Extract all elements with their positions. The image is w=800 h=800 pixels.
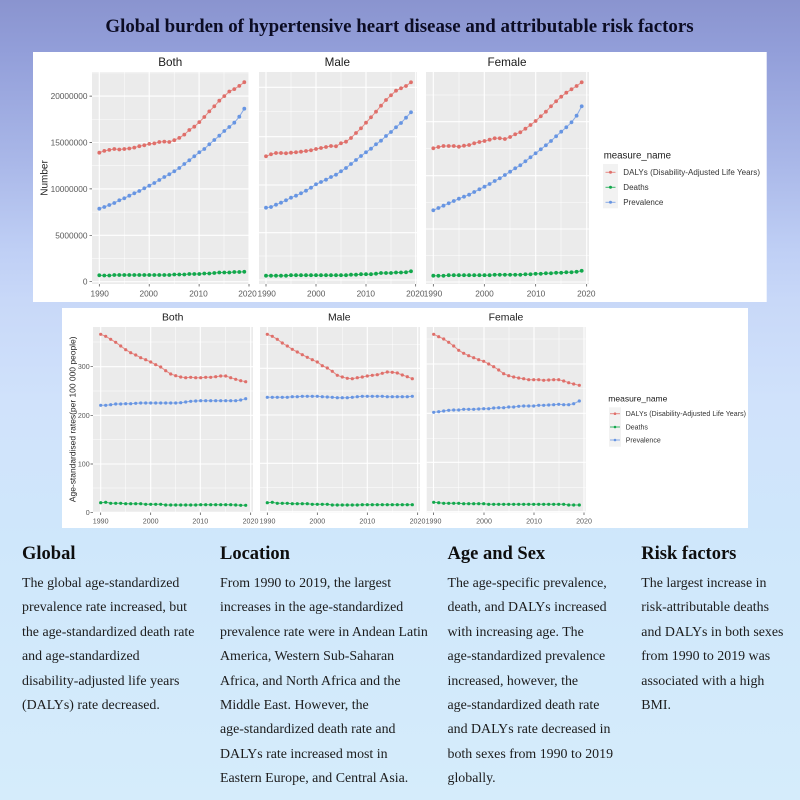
chart: number, male: 2010 — [357, 288, 375, 298]
text block: Location: America, Western Sub-Saharan — [220, 649, 394, 664]
text block: Risk factors: BMI. — [641, 698, 671, 713]
chart: number, both sexes: 15000000 — [51, 138, 88, 148]
text block: Location: Middle East. However, the — [220, 698, 369, 713]
text block: Risk factors: associated with a high — [641, 674, 764, 689]
chart: number, male: 1990 — [257, 288, 276, 298]
chart: number, both sexes: 10000000 — [51, 184, 88, 194]
text block: Location: age-standardized death rate and — [220, 722, 395, 737]
y axis title: age-standardised rates: Age-standardised rates(per 100 000 people) — [67, 336, 77, 502]
chart: number, both sexes: 5000000 — [55, 230, 88, 240]
chart: number, male: 2020 — [406, 288, 425, 298]
text block: Global — [22, 544, 194, 713]
text block: Location: Location — [220, 544, 290, 564]
chart: number, female: Female — [488, 56, 526, 69]
chart: number, male — [257, 56, 425, 298]
chart: number, both sexes: 20000000 — [51, 91, 88, 101]
legend: number charts: DALYs (Disability-Adjusted Life Years) — [623, 168, 760, 177]
text block: Age and Sex: both sexes from 1990 to 2019 — [448, 747, 613, 762]
text block: Global: The global age-standardized — [22, 576, 179, 591]
text block: Global: prevalence rate increased, but — [22, 600, 187, 615]
y axis title: Number: Number — [40, 160, 50, 196]
chart: rates, both sexes: 300 — [78, 363, 90, 371]
text block: Age and Sex: and DALYs rate decreased in — [448, 722, 610, 737]
text block: Risk factors: Risk factors — [641, 544, 736, 564]
chart: number, both sexes: 2020 — [238, 288, 257, 298]
chart: number, male: 2000 — [307, 288, 326, 298]
text block: Risk factors: from 1990 to 2019 was — [641, 649, 770, 664]
text block: Global: the age-standardized death rate — [22, 625, 194, 640]
chart: number, both sexes: 1990 — [90, 288, 109, 298]
text block: Age and Sex: with increasing age. The — [448, 625, 584, 640]
text block: Risk factors — [641, 544, 783, 713]
chart: rates, male: 2000 — [309, 518, 325, 526]
legend: rate charts: Prevalence — [626, 438, 661, 444]
chart: number, female: 2000 — [475, 288, 494, 298]
legend: rate charts: measure_name — [608, 394, 668, 404]
chart: rates, male: 2010 — [359, 518, 375, 526]
chart: rates, both sexes: 200 — [78, 412, 90, 420]
chart: rates, male: Male — [328, 312, 351, 324]
text block: Age and Sex: increased, however, the — [448, 674, 578, 689]
chart: number, female: 2020 — [577, 288, 596, 298]
chart: rates, both sexes: Both — [162, 312, 184, 324]
panel: age-standardised rate charts — [62, 308, 748, 528]
legend: number charts — [603, 150, 760, 208]
legend: rate charts: DALYs (Disability-Adjusted Life Years) — [626, 411, 746, 418]
text block: Risk factors: The largest increase in — [641, 576, 766, 591]
chart: number, female: 2010 — [527, 288, 546, 298]
chart: rates, female: 2020 — [576, 518, 592, 526]
chart: rates, male: 2020 — [410, 518, 425, 526]
chart: number, both sexes: 2000 — [139, 288, 158, 298]
text block: Location: prevalence rate were in Andean Latin — [220, 625, 428, 640]
text block: Risk factors: risk-attributable deaths — [641, 600, 769, 615]
text block: Risk factors: and DALYs in both sexes — [641, 625, 783, 640]
chart: number, both sexes: Both — [158, 56, 182, 69]
text block: Age and Sex: death, and DALYs increased — [448, 600, 607, 615]
chart: rates, male — [260, 312, 425, 526]
chart: rates, female — [426, 312, 592, 526]
text block: Age and Sex: Age and Sex — [448, 544, 545, 564]
text block: Location — [220, 544, 428, 786]
chart: rates, female: 2010 — [526, 518, 542, 526]
text block: Location: Eastern Europe, and Central Asia. — [220, 771, 408, 786]
chart: rates, both sexes: 0 — [86, 509, 90, 517]
text block: Global: Global — [22, 544, 75, 564]
legend: number charts: Deaths — [623, 183, 649, 192]
chart: number, female: 1990 — [424, 288, 443, 298]
chart: rates, female: 2000 — [476, 518, 492, 526]
text block: Global: disability-adjusted life years — [22, 674, 179, 689]
text block: Location: increases in the age-standardized — [220, 600, 403, 615]
chart: number, female — [424, 56, 596, 298]
legend: rate charts: Deaths — [626, 424, 648, 432]
legend: number charts: measure_name — [604, 150, 671, 161]
chart: rates, both sexes: 2010 — [192, 518, 208, 526]
legend: rate charts — [608, 394, 746, 447]
chart: rates, male: 1990 — [260, 518, 275, 526]
legend: number charts: Prevalence — [623, 198, 664, 207]
chart: rates, female: Female — [489, 312, 524, 324]
text block: Global: and age-standardized — [22, 649, 140, 664]
text block: Location: Africa, and North Africa and the — [220, 674, 401, 689]
chart: rates, both sexes: 2020 — [243, 518, 258, 526]
chart: number, both sexes: 0 — [83, 277, 88, 287]
text block: Global: (DALYs) rate decreased. — [22, 698, 160, 713]
chart: rates, both sexes: 1990 — [93, 518, 109, 526]
chart: number, both sexes: 2010 — [189, 288, 208, 298]
title: Global burden of hypertensive heart disease and attributable risk factors — [105, 16, 694, 36]
panel: number charts — [33, 52, 767, 302]
chart: number, male: Male — [325, 56, 350, 69]
chart: number, both sexes — [51, 56, 257, 298]
text block: Age and Sex — [448, 544, 613, 786]
text block: Age and Sex: age-standardized prevalence — [448, 649, 605, 664]
chart: rates, both sexes: 100 — [78, 460, 90, 468]
text block: Location: DALYs rate increased most in — [220, 747, 388, 762]
text block: Age and Sex: globally. — [448, 771, 496, 786]
chart: rates, female: 1990 — [426, 518, 441, 526]
text block: Location: From 1990 to 2019, the largest — [220, 576, 391, 591]
text block: Age and Sex: The age-specific prevalence, — [448, 576, 607, 591]
chart: rates, both sexes — [78, 312, 258, 526]
chart: rates, both sexes: 2000 — [143, 518, 159, 526]
text block: Age and Sex: age-standardized death rate — [448, 698, 599, 713]
